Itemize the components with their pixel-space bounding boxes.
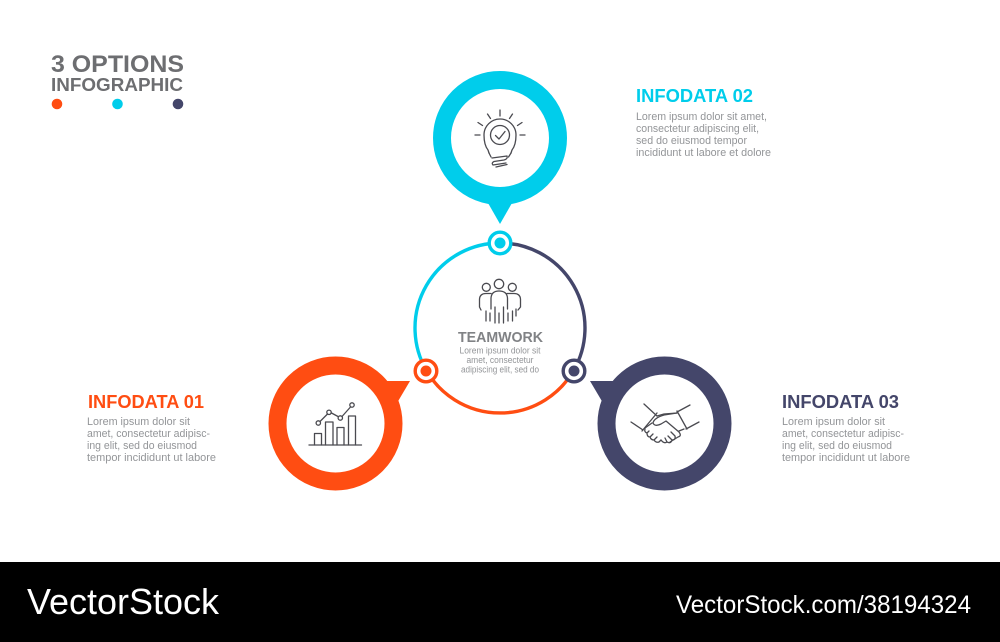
title block bbox=[51, 51, 184, 109]
text: infodata 03: ing elit, sed do eiusmod bbox=[782, 440, 892, 452]
center text: teamwork: Lorem ipsum dolor sit bbox=[460, 346, 541, 356]
title block: 3 OPTIONS bbox=[51, 51, 184, 78]
footer band: VectorStock.com/38194324 bbox=[676, 591, 971, 619]
node: navy bbox=[563, 360, 585, 382]
text: infodata 03: INFODATA 03 bbox=[782, 392, 899, 412]
pin: teal bbox=[442, 80, 558, 224]
text: infodata 03: Lorem ipsum dolor sit bbox=[782, 416, 885, 428]
text: infodata 01: tempor incididunt ut labore bbox=[87, 452, 216, 464]
text: infodata 01 bbox=[87, 392, 216, 464]
center text: teamwork: amet, consectetur bbox=[466, 355, 534, 365]
center text: teamwork bbox=[458, 329, 543, 374]
text: infodata 02: incididunt ut labore et dolore bbox=[636, 147, 771, 159]
node: orange bbox=[415, 360, 437, 382]
title block: INFOGRAPHIC bbox=[51, 74, 183, 95]
footer band: VectorStock bbox=[27, 581, 220, 622]
pin: orange bbox=[278, 366, 410, 482]
text: infodata 03: amet, consectetur adipisc- bbox=[782, 428, 904, 440]
text: infodata 03: tempor incididunt ut labore bbox=[782, 452, 910, 464]
text: infodata 03 bbox=[782, 392, 910, 464]
text: infodata 02 bbox=[636, 86, 771, 159]
icon: bar chart bbox=[309, 403, 362, 445]
pin: navy bbox=[590, 366, 722, 482]
icon: team bbox=[480, 279, 520, 323]
text: infodata 01: ing elit, sed do eiusmod bbox=[87, 440, 197, 452]
icon: light bulb bbox=[475, 110, 525, 167]
text: infodata 01: amet, consectetur adipisc- bbox=[87, 428, 210, 440]
text: infodata 01: INFODATA 01 bbox=[88, 392, 204, 412]
text: infodata 02: INFODATA 02 bbox=[636, 86, 753, 106]
central ring bbox=[415, 243, 585, 413]
footer band bbox=[0, 562, 1000, 642]
center text: teamwork: TEAMWORK bbox=[458, 329, 543, 346]
center text: teamwork: adipiscing elit, sed do bbox=[461, 364, 539, 374]
text: infodata 02: Lorem ipsum dolor sit amet, bbox=[636, 111, 767, 123]
text: infodata 02: sed do eiusmod tempor bbox=[636, 135, 747, 147]
node: teal bbox=[489, 232, 511, 254]
text: infodata 01: Lorem ipsum dolor sit bbox=[87, 416, 190, 428]
icon: handshake bbox=[631, 404, 699, 443]
text: infodata 02: consectetur adipiscing elit, bbox=[636, 123, 759, 135]
